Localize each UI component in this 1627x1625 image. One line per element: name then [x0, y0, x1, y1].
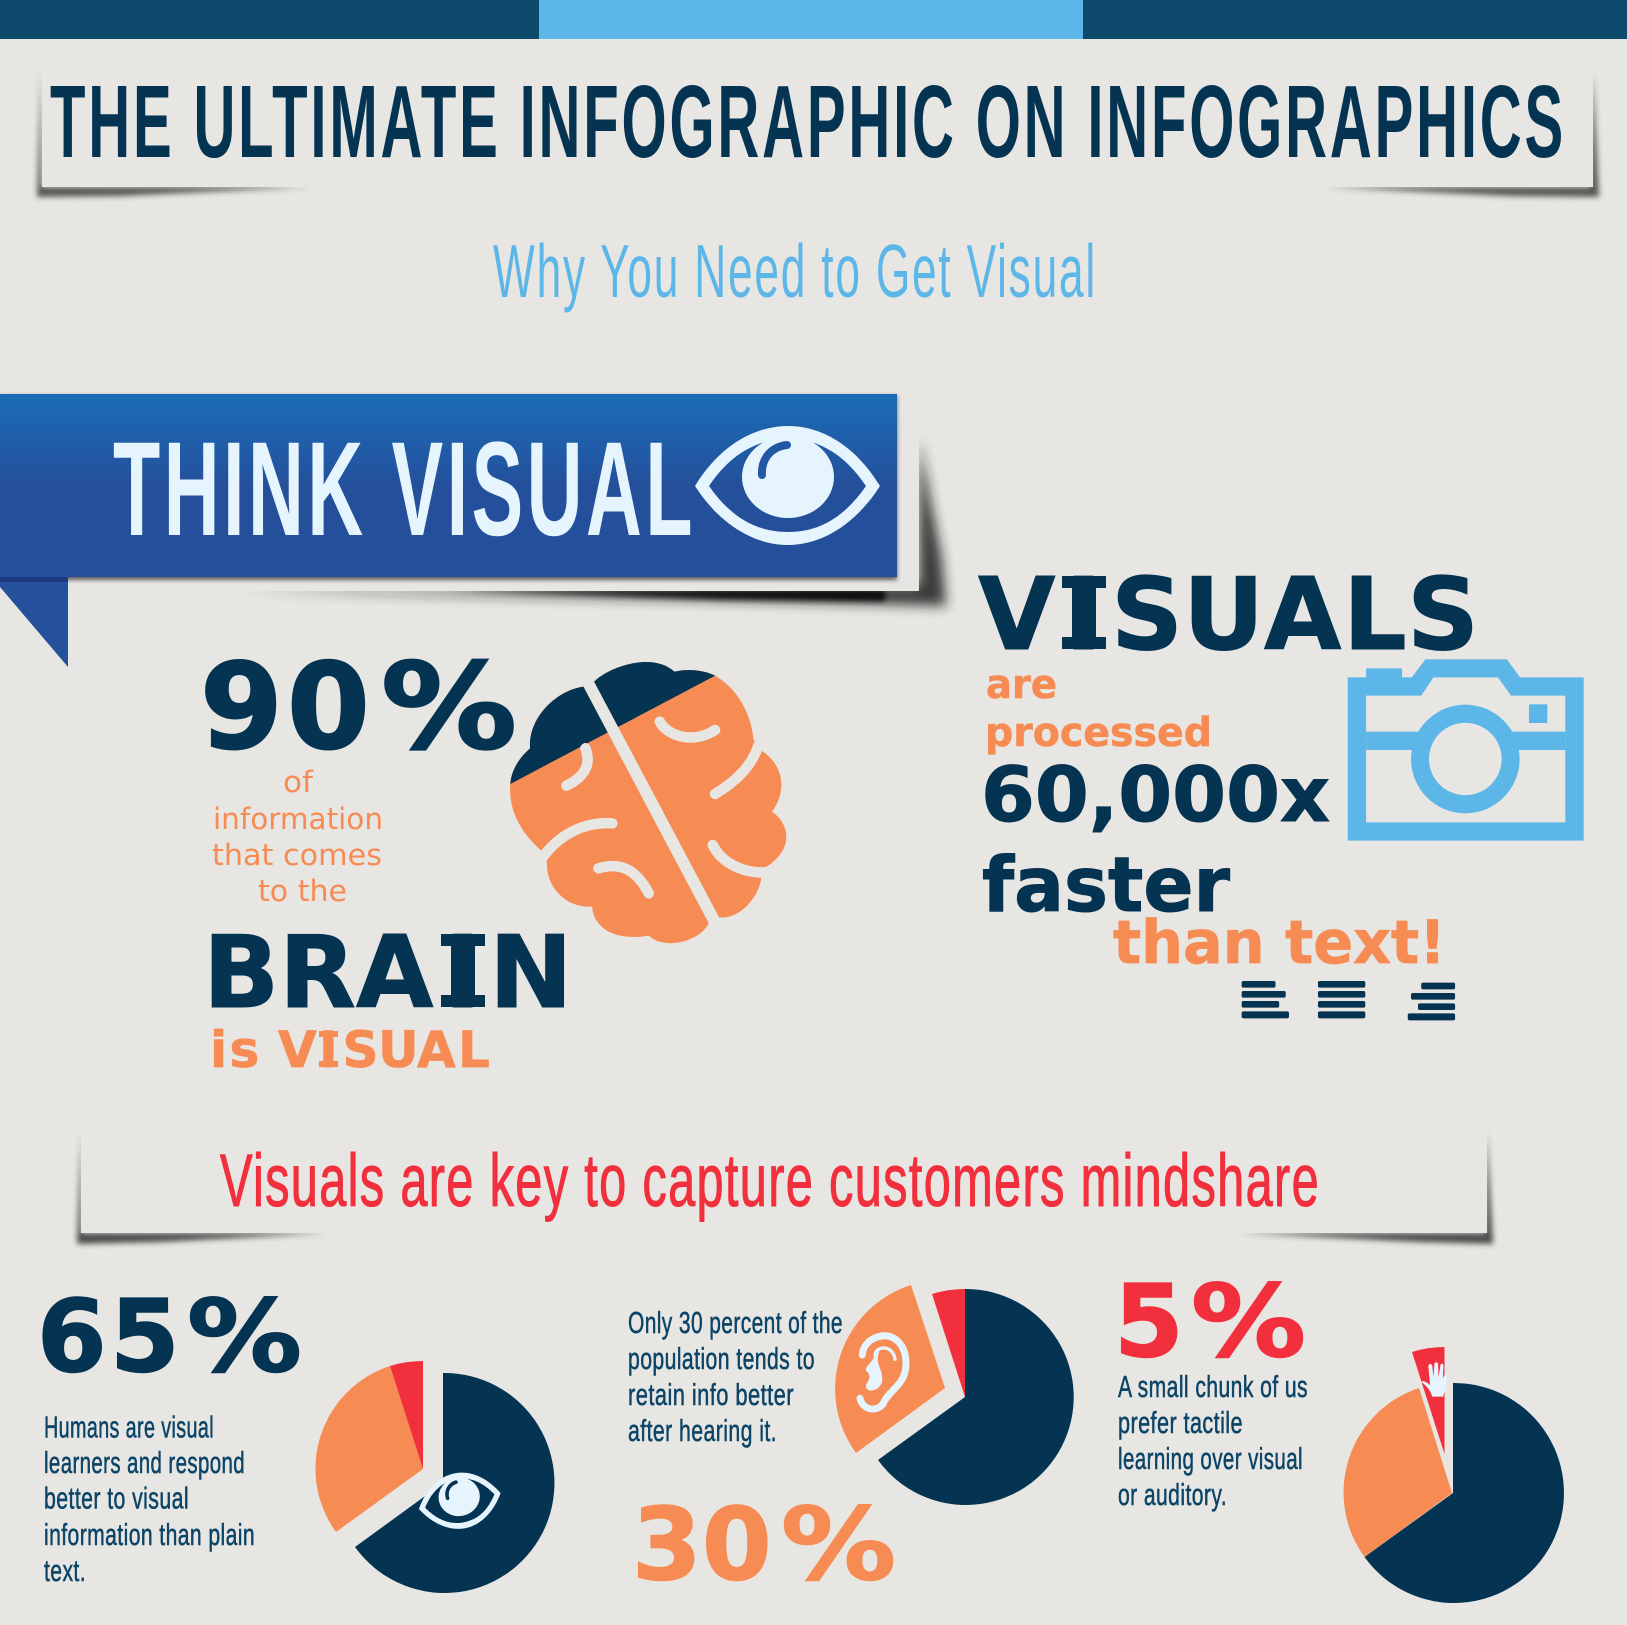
5% figure — [1114, 1263, 1306, 1380]
text: humans are visual learners: better to visual — [44, 1480, 189, 1516]
title banner — [37, 64, 1599, 197]
5% figure: 5 — [1114, 1263, 1184, 1380]
text: of information that comes to the: of — [283, 765, 314, 799]
top colour bar — [0, 0, 1627, 39]
panel: 5 percent tactile learners — [1114, 1263, 1564, 1603]
panel: visuals statistic — [978, 556, 1584, 1020]
90% figure: % — [381, 639, 517, 777]
65% figure — [37, 1278, 302, 1395]
think visual ribbon — [0, 394, 946, 667]
icon: eye — [695, 426, 880, 545]
text: small chunk: learning over visual — [1118, 1441, 1303, 1476]
text: small chunk: prefer tactile — [1118, 1405, 1243, 1440]
text: only 30 percent — [628, 1305, 843, 1448]
think visual heading: THINK VISUAL — [113, 415, 696, 564]
text: small chunk — [1118, 1369, 1308, 1512]
65% figure: % — [187, 1278, 302, 1395]
BRAIN word: BRAIN — [203, 914, 573, 1031]
65% figure: 65 — [37, 1278, 180, 1395]
text: of information that comes to the: to the — [258, 874, 347, 908]
pie chart: 5 percent — [1344, 1347, 1564, 1603]
text: only 30 percent: after hearing it. — [628, 1413, 777, 1448]
is VISUAL: VISUAL — [278, 1021, 490, 1079]
5% figure: % — [1191, 1263, 1306, 1380]
text: humans are visual learners: Humans are visual — [44, 1410, 214, 1444]
text: small chunk: or auditory. — [1118, 1477, 1227, 1512]
text: only 30 percent: Only 30 percent of the — [628, 1305, 843, 1340]
text: humans are visual learners — [44, 1410, 255, 1588]
icon: brain — [510, 662, 786, 943]
VISUALS word: VISUALS — [978, 556, 1479, 673]
is VISUAL: is — [210, 1021, 259, 1079]
than text: than text! — [1113, 908, 1446, 978]
text: small chunk: A small chunk of us — [1118, 1369, 1308, 1404]
90% figure — [200, 639, 517, 777]
text: only 30 percent: retain info better — [628, 1377, 794, 1412]
panel: brain statistic — [200, 639, 786, 1079]
pie chart: 65 percent — [315, 1361, 554, 1593]
30% figure — [632, 1486, 896, 1603]
text: only 30 percent: population tends to — [628, 1341, 815, 1376]
icon: camera — [1348, 659, 1584, 841]
text: humans are visual learners: learners and respond — [44, 1445, 245, 1480]
icon: ear — [860, 1336, 906, 1409]
text: humans are visual learners: text. — [44, 1553, 86, 1588]
30% figure: 30 — [632, 1486, 772, 1603]
are processed: processed — [985, 710, 1212, 756]
faster word: faster — [982, 840, 1230, 929]
icon: small eye — [414, 1465, 506, 1536]
text: of information that comes to the: information — [213, 802, 383, 836]
ribbon fold — [0, 577, 68, 667]
text: of information that comes to the — [212, 765, 383, 908]
panel: 30 percent auditory learners — [628, 1285, 1074, 1603]
subtitle: Why You Need to Get Visual — [493, 229, 1097, 313]
mindshare banner — [77, 1128, 1493, 1244]
text: humans are visual learners: information than plain — [44, 1517, 255, 1552]
text: of information that comes to the: that comes — [212, 838, 382, 872]
30% figure: % — [781, 1486, 896, 1603]
are processed — [985, 662, 1212, 756]
90% figure: 90 — [200, 639, 370, 777]
pie chart: 30 percent — [835, 1285, 1074, 1505]
60,000x figure: 60,000x — [981, 750, 1330, 839]
panel: 65 percent visual learners — [37, 1278, 554, 1593]
icon: text alignment glyphs — [1242, 981, 1455, 1020]
are processed: are — [986, 662, 1057, 708]
icon: hand — [1421, 1362, 1446, 1397]
